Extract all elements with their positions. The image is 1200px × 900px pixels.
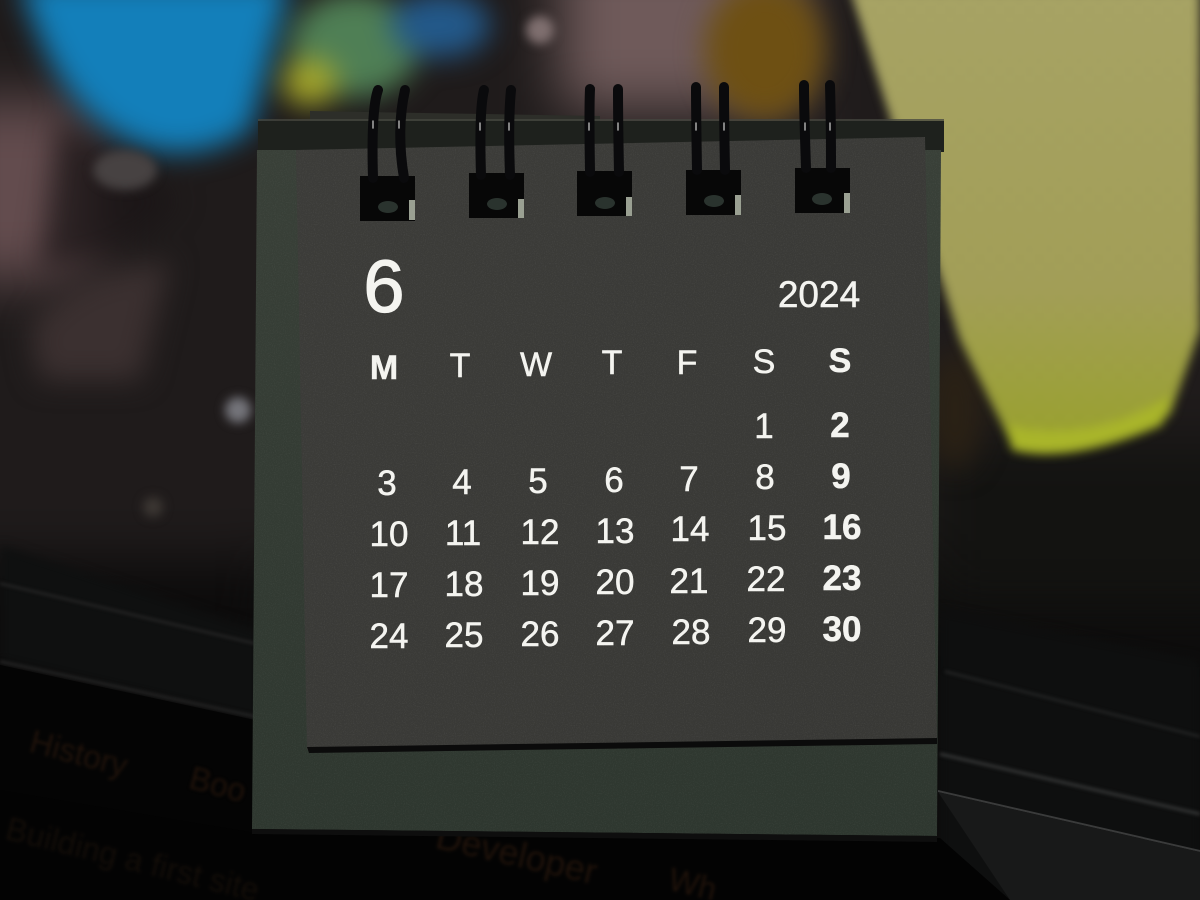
- date row 3: 16: [823, 508, 861, 547]
- date row 3: 13: [596, 512, 634, 551]
- date row 4: 22: [747, 560, 785, 599]
- date row 4: 18: [445, 565, 483, 604]
- date row 3: 12: [521, 513, 559, 552]
- blurred book titles: Developer: [432, 815, 601, 892]
- date row 1: [754, 406, 850, 446]
- weekday header row: S: [829, 342, 851, 380]
- date row 5: 29: [748, 611, 786, 650]
- weekday header row: T: [450, 347, 470, 385]
- weekday header row: W: [520, 346, 552, 384]
- date row 4: 21: [670, 562, 708, 601]
- binding holes: [360, 168, 850, 221]
- yellow mesh cup: [850, 0, 1200, 454]
- date row 2: [377, 457, 851, 503]
- foreground dark book stack: [0, 545, 1200, 900]
- date row 5: 26: [521, 615, 559, 654]
- date row 2: 4: [452, 463, 472, 502]
- date row 2: 9: [831, 457, 851, 496]
- date row 5: 27: [596, 614, 634, 653]
- blurred book titles: Boo: [186, 760, 250, 809]
- date row 4: 19: [521, 564, 559, 603]
- date row 5: 25: [445, 616, 483, 655]
- date row 5: [370, 610, 861, 656]
- spiral binding rings: [373, 85, 831, 178]
- date row 2: 3: [377, 464, 397, 503]
- blurred book titles: [2, 723, 720, 900]
- calendar page: [296, 137, 937, 753]
- date row 1: 2: [830, 406, 850, 445]
- date row 4: 23: [823, 559, 861, 598]
- blurred book titles: History: [26, 723, 132, 784]
- calendar base stand: [252, 111, 944, 842]
- weekday header row: M: [370, 349, 398, 387]
- date row 1: 1: [754, 407, 774, 446]
- date row 5: 24: [370, 617, 408, 656]
- date row 4: [370, 559, 861, 605]
- weekday header row: T: [602, 344, 622, 382]
- date row 3: [370, 508, 861, 554]
- date row 2: 8: [755, 458, 775, 497]
- date row 5: 28: [672, 613, 710, 652]
- date row 3: 14: [671, 510, 709, 549]
- blurred bokeh lights: [93, 16, 554, 517]
- date row 2: 5: [528, 462, 548, 501]
- date row 5: 30: [823, 610, 861, 649]
- year: 2024: [778, 274, 860, 315]
- date row 3: 11: [445, 514, 481, 553]
- date row 4: 20: [596, 563, 634, 602]
- month number: 6: [363, 245, 405, 328]
- date row 3: 15: [748, 509, 786, 548]
- date row 4: 17: [370, 566, 408, 605]
- date row 2: 7: [679, 460, 699, 499]
- weekday header row: S: [753, 343, 775, 381]
- weekday header row: [370, 342, 851, 387]
- weekday header row: F: [677, 344, 697, 382]
- date row 2: 6: [604, 461, 624, 500]
- date row 3: 10: [370, 515, 408, 554]
